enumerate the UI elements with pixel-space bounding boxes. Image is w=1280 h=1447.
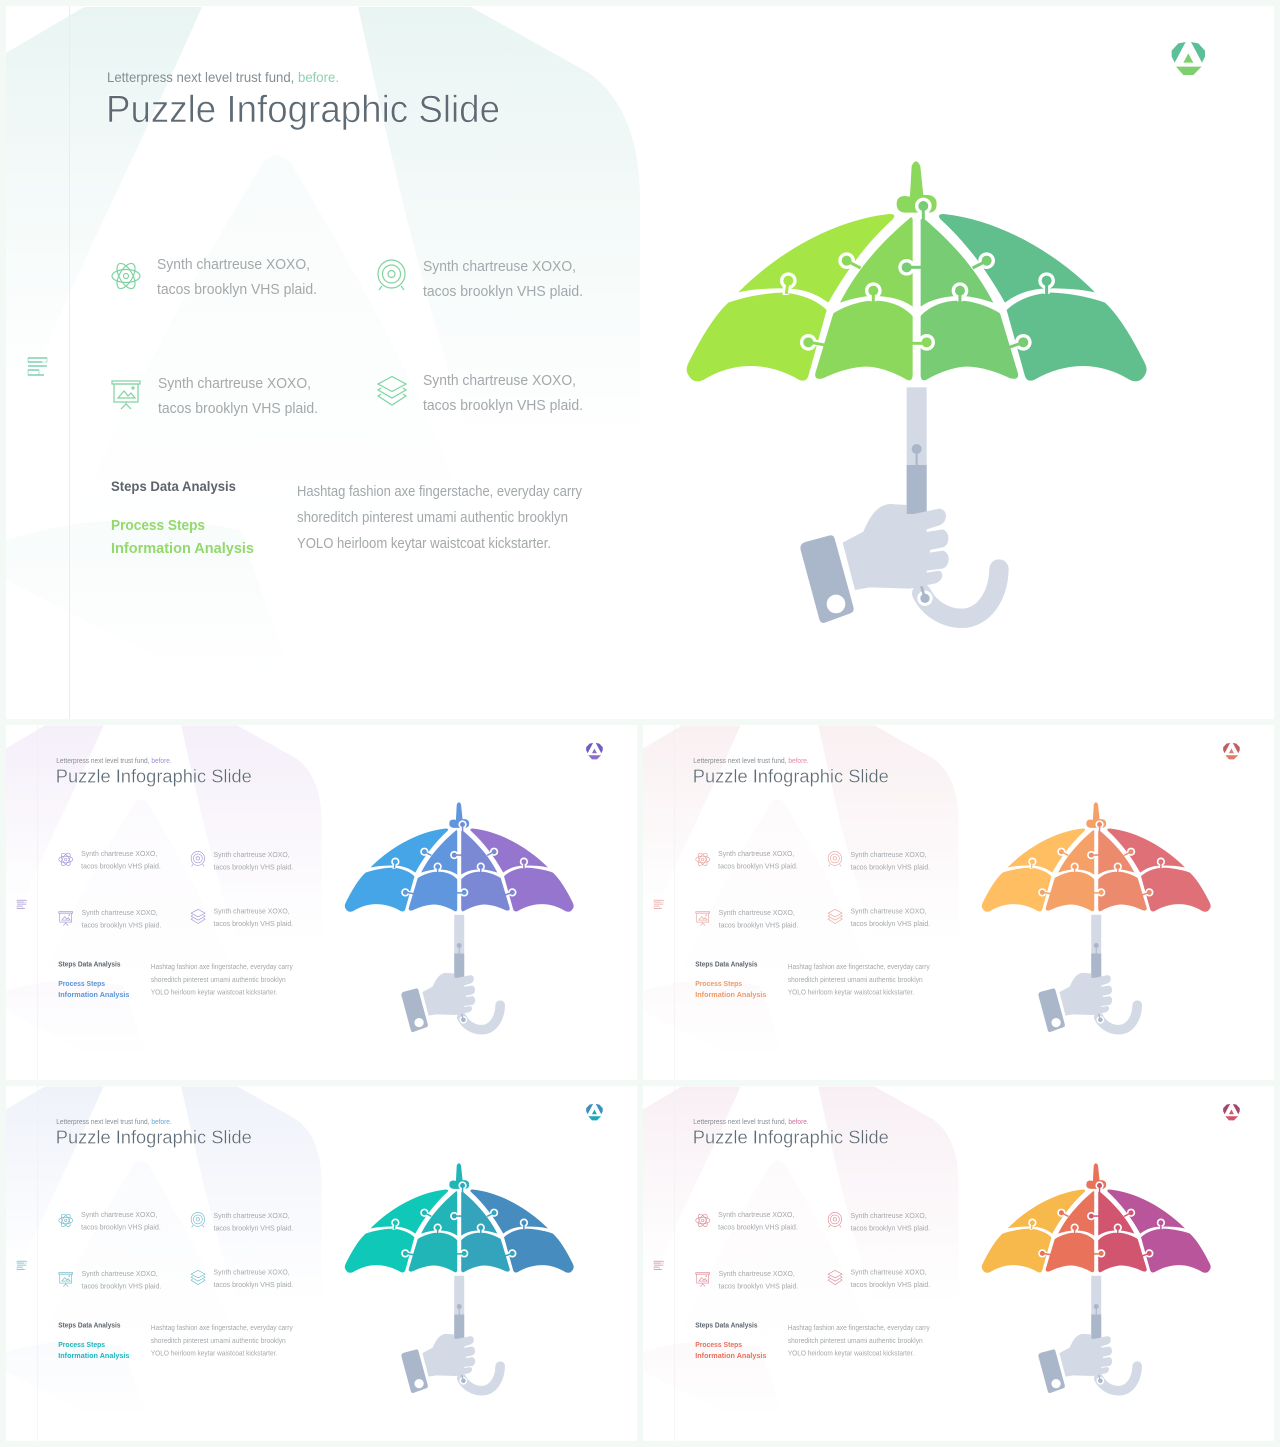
feature text 4: Synth chartreuse XOXO, — [214, 907, 290, 916]
icon: target — [828, 1212, 842, 1227]
icon: layers — [191, 1270, 205, 1285]
paragraph: YOLO heirloom keytar waistcoat kickstarter. — [788, 1349, 914, 1358]
feature text 2: Synth chartreuse XOXO, — [214, 1211, 290, 1220]
paragraph: YOLO heirloom keytar waistcoat kickstarter. — [151, 1349, 277, 1358]
feature text 1: Synth chartreuse XOXO, — [157, 256, 310, 273]
feature text 4: tacos brooklyn VHS plaid. — [851, 1280, 930, 1289]
feature text 3 — [158, 375, 318, 417]
paragraph — [297, 484, 583, 552]
accent heading — [58, 979, 129, 999]
umbrella handle and hand — [401, 915, 500, 1032]
accent heading: Process Steps — [695, 979, 742, 988]
feature text 3 — [82, 908, 161, 930]
icon: target — [828, 851, 842, 866]
accent heading: Process Steps — [58, 979, 105, 988]
feature text 4: Synth chartreuse XOXO, — [423, 372, 576, 389]
paragraph: Hashtag fashion axe fingerstache, everyday carry — [788, 1323, 930, 1332]
feature text 2: Synth chartreuse XOXO, — [851, 850, 927, 859]
sidebar icon — [654, 1261, 663, 1270]
icon: target — [191, 851, 205, 866]
accent heading: Information Analysis — [58, 990, 129, 999]
title: Puzzle Infographic Slide — [106, 89, 500, 131]
feature text 1: tacos brooklyn VHS plaid. — [81, 1222, 161, 1231]
umbrella handle and hand — [1038, 915, 1137, 1032]
paragraph — [788, 1323, 930, 1358]
sidebar icon — [28, 358, 47, 375]
feature text 1: Synth chartreuse XOXO, — [718, 849, 794, 858]
feature text 4 — [423, 372, 583, 414]
heading: steps data analysis: Steps Data Analysis — [695, 961, 758, 968]
panel: teal blue slide — [6, 1086, 637, 1441]
subtitle: Letterpress next level trust fund, before. — [56, 1119, 172, 1126]
icon: presentation board — [112, 381, 140, 409]
logo — [1223, 743, 1240, 759]
feature text 2 — [423, 258, 583, 300]
feature text 3 — [719, 908, 798, 930]
feature text 3: tacos brooklyn VHS plaid. — [82, 921, 161, 930]
puzzle umbrella canopy — [345, 1163, 574, 1273]
icon: atom — [59, 852, 73, 867]
paragraph — [151, 1323, 293, 1358]
paragraph: YOLO heirloom keytar waistcoat kickstarter. — [151, 988, 277, 997]
paragraph: Hashtag fashion axe fingerstache, everyday carry — [151, 1323, 293, 1332]
feature text 4 — [214, 1268, 293, 1289]
icon: atom — [112, 261, 140, 291]
umbrella handle and hand — [800, 387, 999, 623]
icon: layers — [828, 1270, 842, 1285]
umbrella handle and hand — [1038, 1276, 1137, 1393]
paragraph — [151, 962, 293, 997]
paragraph: YOLO heirloom keytar waistcoat kickstarter. — [788, 988, 914, 997]
feature text 1 — [81, 849, 161, 870]
paragraph: YOLO heirloom keytar waistcoat kickstarter. — [297, 536, 551, 552]
icon: presentation board — [59, 1273, 73, 1287]
accent heading: Process Steps — [58, 1340, 105, 1349]
feature text 4 — [214, 907, 293, 928]
puzzle umbrella canopy — [345, 802, 574, 912]
accent heading: Information Analysis — [695, 1351, 766, 1360]
feature text 4: Synth chartreuse XOXO, — [851, 1268, 927, 1277]
feature text 2 — [214, 850, 293, 871]
feature text 1: tacos brooklyn VHS plaid. — [81, 861, 161, 870]
sidebar icon — [654, 900, 663, 909]
accent heading — [695, 1340, 766, 1360]
heading: steps data analysis: Steps Data Analysis — [695, 1322, 758, 1329]
feature text 1: Synth chartreuse XOXO, — [718, 1210, 794, 1219]
feature text 2: tacos brooklyn VHS plaid. — [214, 1223, 293, 1232]
feature text 1: tacos brooklyn VHS plaid. — [718, 1222, 798, 1231]
feature text 2: tacos brooklyn VHS plaid. — [423, 283, 583, 300]
icon: presentation board — [696, 912, 710, 926]
logo — [1172, 42, 1205, 75]
paragraph: shoreditch pinterest umami authentic brooklyn — [788, 975, 923, 984]
heading: steps data analysis: Steps Data Analysis — [58, 1322, 121, 1329]
panel: blue purple slide — [6, 725, 637, 1080]
icon: layers — [191, 909, 205, 924]
paragraph: Hashtag fashion axe fingerstache, everyday carry — [788, 962, 930, 971]
panel: orange red slide — [643, 725, 1274, 1080]
heading: steps data analysis: Steps Data Analysis — [111, 478, 236, 494]
puzzle umbrella canopy — [687, 161, 1147, 381]
accent heading: Information Analysis — [695, 990, 766, 999]
accent heading: Information Analysis — [111, 540, 254, 557]
feature text 3: Synth chartreuse XOXO, — [82, 1269, 158, 1278]
paragraph: shoreditch pinterest umami authentic brooklyn — [151, 1336, 286, 1345]
subtitle: Letterpress next level trust fund, before. — [693, 758, 809, 765]
sidebar icon — [17, 1261, 26, 1270]
accent heading — [695, 979, 766, 999]
feature text 2 — [214, 1211, 293, 1232]
feature text 2: tacos brooklyn VHS plaid. — [851, 1223, 930, 1232]
feature text 3 — [719, 1269, 798, 1291]
subtitle: Letterpress next level trust fund, before. — [693, 1119, 809, 1126]
feature text 1: Synth chartreuse XOXO, — [81, 849, 157, 858]
feature text 3: Synth chartreuse XOXO, — [719, 1269, 795, 1278]
feature text 2: Synth chartreuse XOXO, — [214, 850, 290, 859]
feature text 3: Synth chartreuse XOXO, — [82, 908, 158, 917]
feature text 2: Synth chartreuse XOXO, — [423, 258, 576, 275]
paragraph: Hashtag fashion axe fingerstache, everyday carry — [151, 962, 293, 971]
accent heading: Information Analysis — [58, 1351, 129, 1360]
icon: atom — [696, 1213, 710, 1228]
feature text 4: tacos brooklyn VHS plaid. — [214, 919, 293, 928]
feature text 4: Synth chartreuse XOXO, — [851, 907, 927, 916]
accent heading: Process Steps — [111, 517, 205, 534]
feature text 3 — [82, 1269, 161, 1291]
feature text 1 — [81, 1210, 161, 1231]
logo — [1223, 1104, 1240, 1120]
logo — [586, 1104, 603, 1120]
title: Puzzle Infographic Slide — [693, 1128, 889, 1149]
heading: steps data analysis: Steps Data Analysis — [58, 961, 121, 968]
icon: layers — [378, 376, 406, 405]
panel: yellow magenta slide — [643, 1086, 1274, 1441]
feature text 4 — [851, 907, 930, 928]
puzzle umbrella canopy — [982, 1163, 1211, 1273]
title: Puzzle Infographic Slide — [693, 767, 889, 788]
subtitle: Letterpress next level trust fund, before. — [107, 69, 339, 85]
feature text 3: tacos brooklyn VHS plaid. — [82, 1282, 161, 1291]
paragraph — [788, 962, 930, 997]
umbrella handle and hand — [401, 1276, 500, 1393]
feature text 2: tacos brooklyn VHS plaid. — [851, 862, 930, 871]
feature text 3: tacos brooklyn VHS plaid. — [719, 1282, 798, 1291]
feature text 3: tacos brooklyn VHS plaid. — [158, 400, 318, 417]
accent heading — [58, 1340, 129, 1360]
feature text 3: tacos brooklyn VHS plaid. — [719, 921, 798, 930]
sidebar icon — [17, 900, 26, 909]
feature text 2: tacos brooklyn VHS plaid. — [214, 862, 293, 871]
icon: target — [191, 1212, 205, 1227]
feature text 1 — [718, 849, 798, 870]
panel: large green slide — [6, 6, 1274, 719]
icon: atom — [696, 852, 710, 867]
feature text 2 — [851, 1211, 930, 1232]
paragraph: shoreditch pinterest umami authentic brooklyn — [788, 1336, 923, 1345]
accent heading — [111, 517, 254, 557]
feature text 4: Synth chartreuse XOXO, — [214, 1268, 290, 1277]
feature text 2 — [851, 850, 930, 871]
logo — [586, 743, 603, 759]
feature text 3: Synth chartreuse XOXO, — [719, 908, 795, 917]
title: Puzzle Infographic Slide — [56, 1128, 252, 1149]
accent heading: Process Steps — [695, 1340, 742, 1349]
icon: presentation board — [59, 912, 73, 926]
feature text 3: Synth chartreuse XOXO, — [158, 375, 311, 392]
puzzle umbrella canopy — [982, 802, 1211, 912]
title: Puzzle Infographic Slide — [56, 767, 252, 788]
icon: layers — [828, 909, 842, 924]
feature text 2: Synth chartreuse XOXO, — [851, 1211, 927, 1220]
feature text 1: tacos brooklyn VHS plaid. — [157, 281, 317, 298]
icon: presentation board — [696, 1273, 710, 1287]
feature text 1: Synth chartreuse XOXO, — [81, 1210, 157, 1219]
feature text 4: tacos brooklyn VHS plaid. — [214, 1280, 293, 1289]
subtitle: Letterpress next level trust fund, before. — [56, 758, 172, 765]
paragraph: shoreditch pinterest umami authentic brooklyn — [151, 975, 286, 984]
paragraph: Hashtag fashion axe fingerstache, everyday carry — [297, 484, 583, 500]
icon: atom — [59, 1213, 73, 1228]
feature text 1 — [718, 1210, 798, 1231]
feature text 1: tacos brooklyn VHS plaid. — [718, 861, 798, 870]
feature text 4: tacos brooklyn VHS plaid. — [851, 919, 930, 928]
feature text 4: tacos brooklyn VHS plaid. — [423, 397, 583, 414]
icon: target — [378, 260, 405, 290]
paragraph: shoreditch pinterest umami authentic brooklyn — [297, 510, 568, 526]
feature text 1 — [157, 256, 317, 298]
feature text 4 — [851, 1268, 930, 1289]
